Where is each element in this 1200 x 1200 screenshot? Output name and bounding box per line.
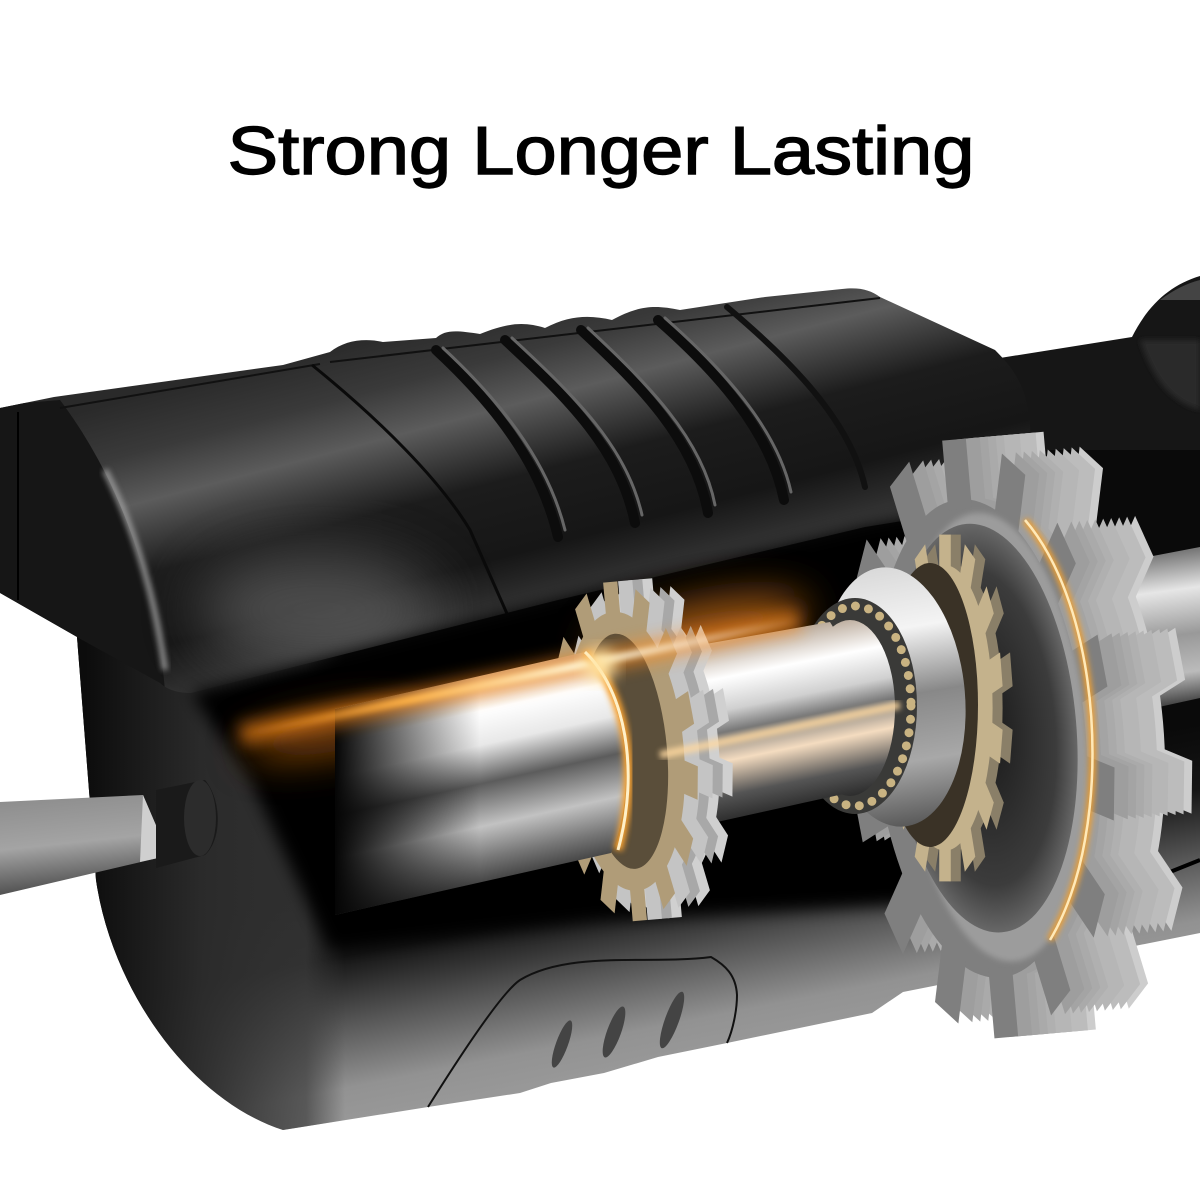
hex bit rod: [0, 780, 218, 895]
drive shaft behind gear: [1100, 547, 1200, 720]
bearing: [793, 561, 976, 833]
housing left facet: [0, 298, 880, 690]
housing seam: [312, 365, 512, 625]
large gear glow arc: [1025, 520, 1092, 940]
small gear: [539, 573, 746, 927]
housing ribs: [436, 307, 865, 537]
title: Strong Longer Lasting: [228, 113, 974, 189]
interior dark cavity: [191, 500, 1000, 950]
grip panel: [428, 957, 737, 1107]
lower motor body: [77, 450, 1200, 1140]
warm glow behind shaft: [243, 580, 813, 767]
gold inner gear: [882, 535, 1013, 881]
orange light effects: [240, 620, 900, 850]
upper housing: [0, 288, 1032, 693]
rear handle tube and knob: [1000, 276, 1200, 620]
large shaft cylinder: [335, 640, 626, 920]
small shaft: [660, 622, 854, 828]
large gear: [823, 421, 1200, 1049]
